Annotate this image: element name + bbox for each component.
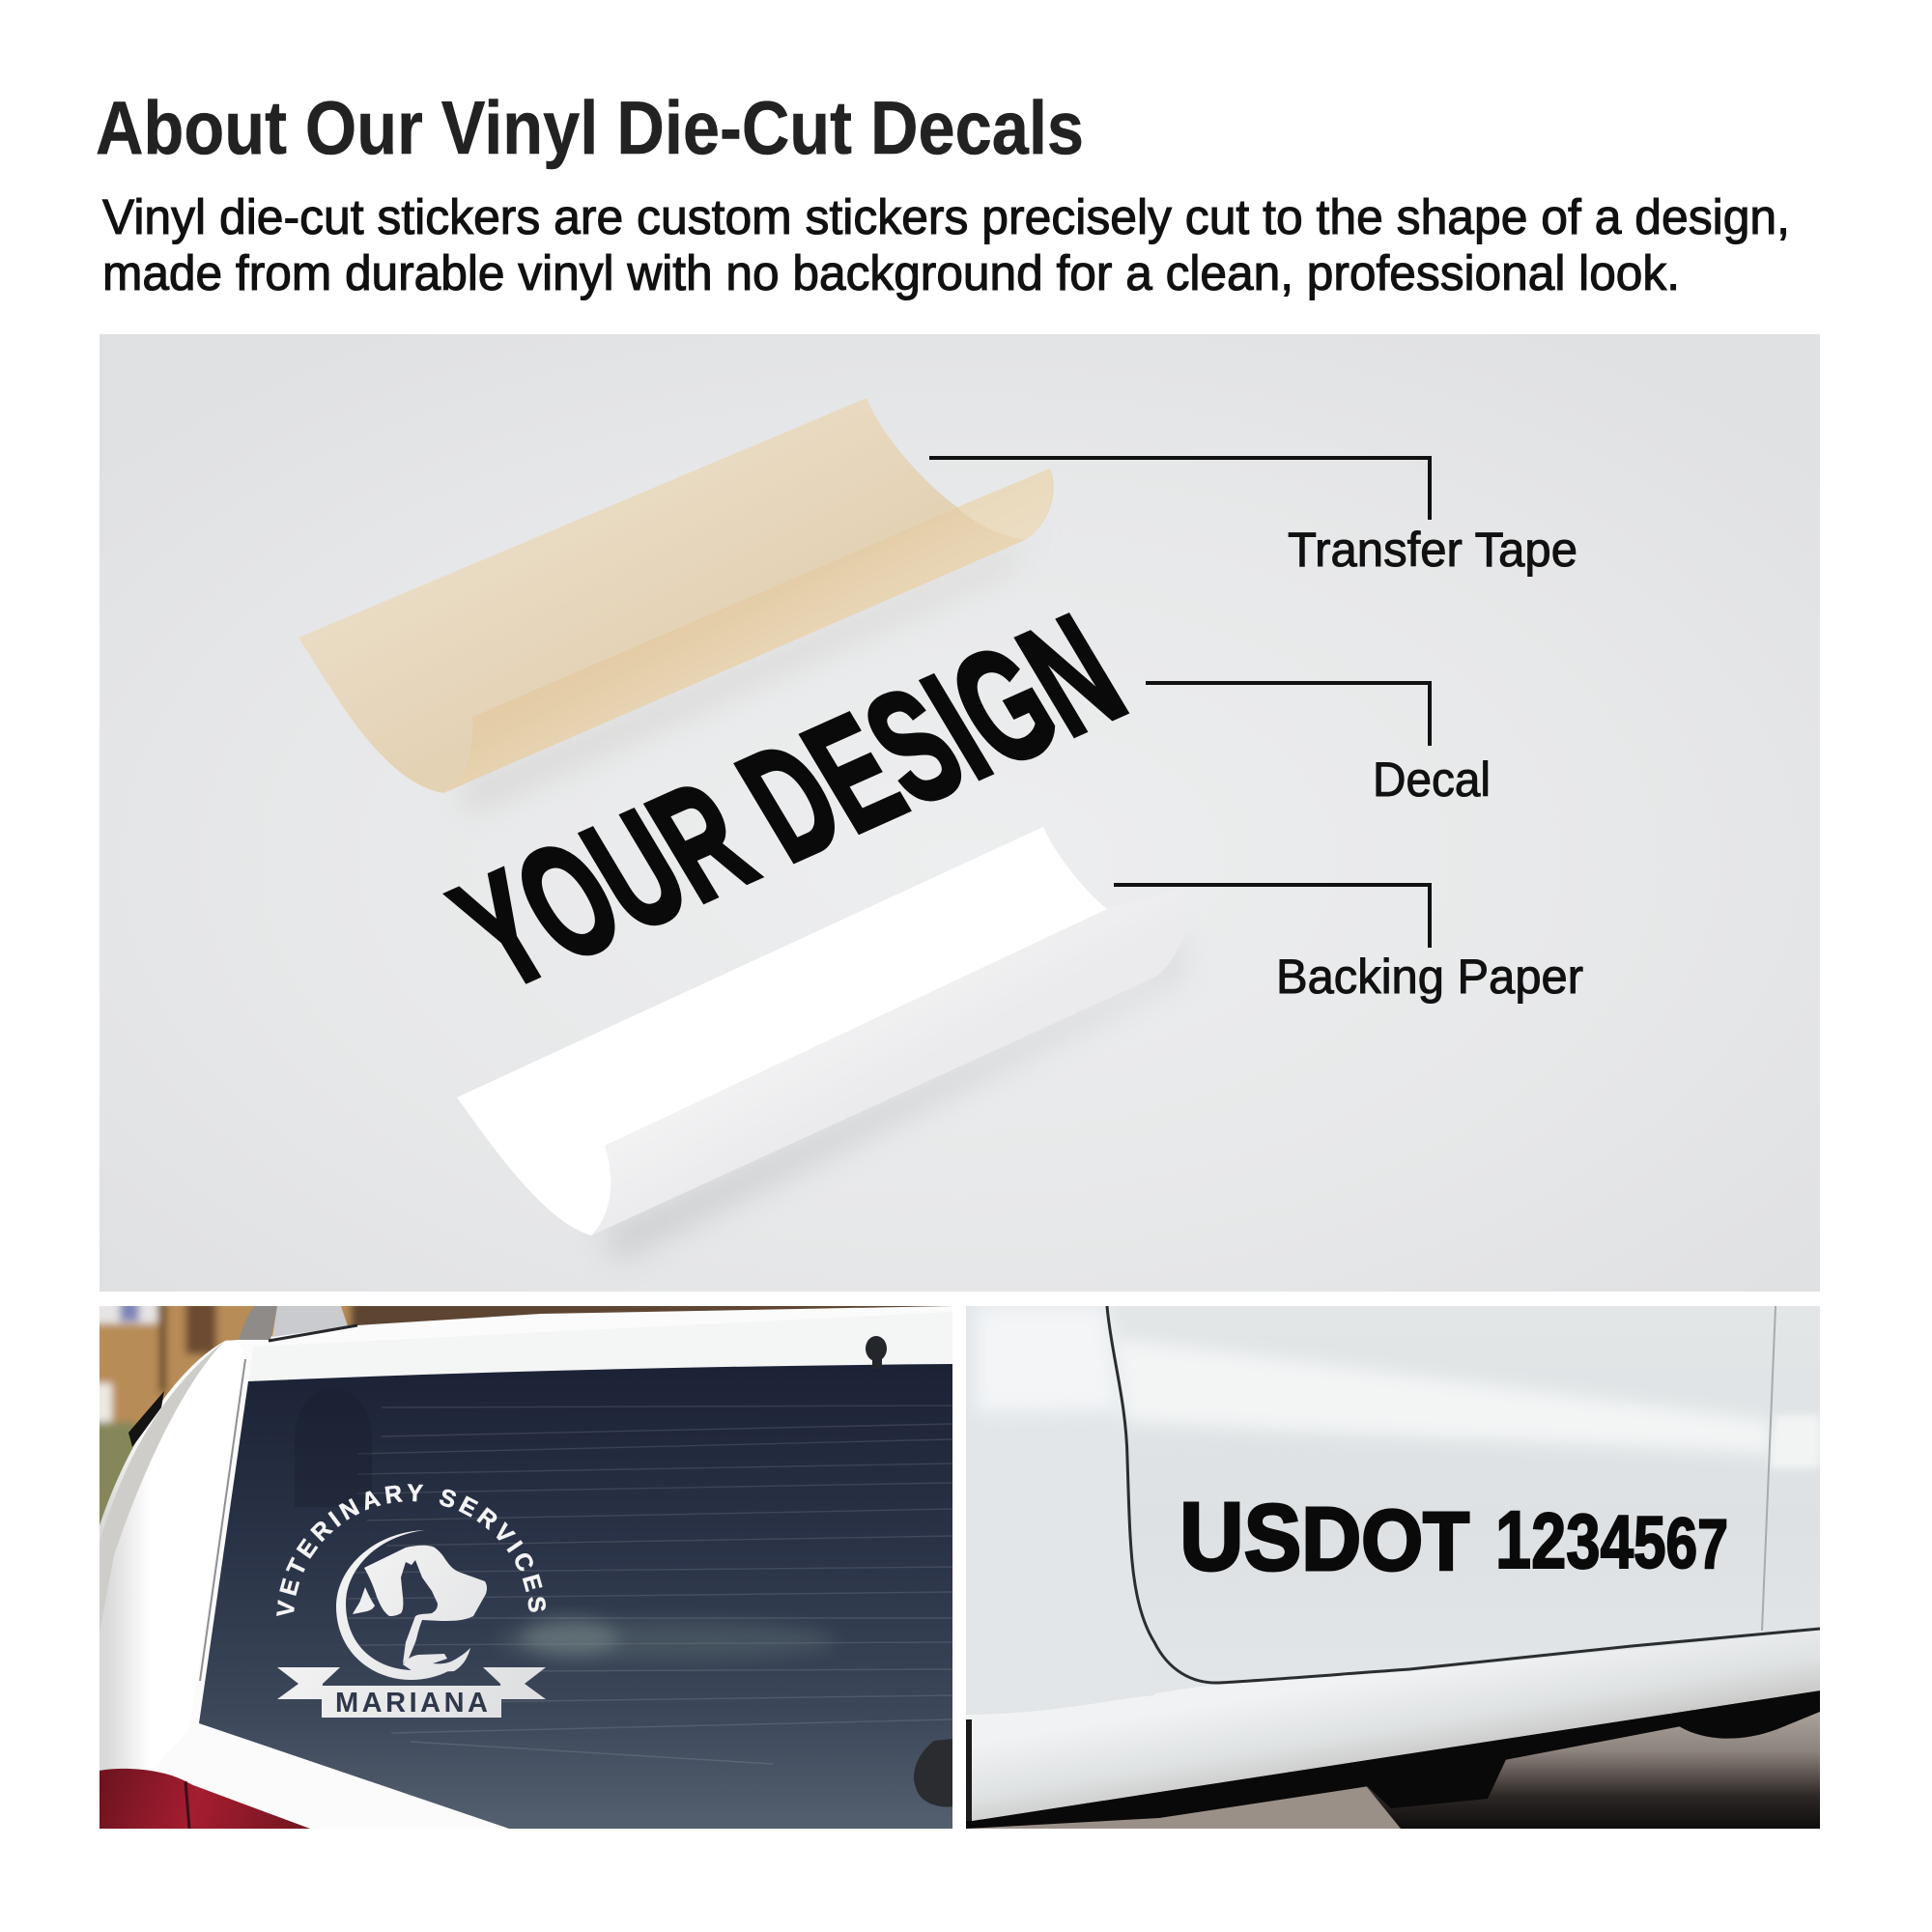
arc text: VETERINARY SERVICES <box>276 1484 546 1616</box>
transfer tape sheet <box>298 398 1058 811</box>
tail lamp <box>99 1769 310 1829</box>
antenna <box>239 1306 357 1341</box>
van body <box>966 1306 1820 1821</box>
arch reflection <box>295 1453 372 1507</box>
roof band shading <box>249 1312 952 1381</box>
leader: transfer tape <box>929 458 1430 520</box>
label: decal: Decal <box>1373 753 1491 807</box>
background building <box>99 1306 952 1526</box>
side mirror shadow <box>128 1391 164 1447</box>
door cut line <box>1107 1306 1820 1683</box>
label: transfer tape: Transfer Tape <box>1288 523 1577 577</box>
rear panel highlight <box>1770 1415 1820 1468</box>
rocker panel <box>966 1631 1820 1821</box>
rear bumper stub <box>966 1719 972 1821</box>
c-pillar <box>99 1341 232 1771</box>
rear washer nozzle <box>866 1336 887 1369</box>
ribbon band <box>322 1686 501 1718</box>
door highlight band <box>1113 1338 1776 1454</box>
rear seam <box>1762 1306 1776 1631</box>
decal: veterinary services logo <box>276 1484 546 1718</box>
wiper motor <box>914 1739 952 1806</box>
crescent <box>336 1530 470 1680</box>
YOUR DESIGN decal: YOUR DESIGN <box>426 582 1151 1022</box>
underbody and tyres <box>966 1676 1820 1829</box>
window reflections <box>348 1406 952 1764</box>
intro text: Vinyl die-cut stickers are custom stickers precisely cut to the shape of a design, <box>102 189 1790 244</box>
dog and cat silhouette <box>364 1546 487 1663</box>
light ground at left <box>966 1782 1401 1829</box>
left body highlight <box>966 1306 1154 1715</box>
glass seam <box>200 1359 245 1681</box>
hand <box>403 1648 470 1673</box>
photo: rear window decal on car <box>99 1306 952 1829</box>
number text: 1234567 <box>1495 1494 1728 1585</box>
ribbon name: MARIANA <box>335 1688 488 1719</box>
intro text: made from durable vinyl with no background for a clean, professional look. <box>102 245 1680 300</box>
USDOT text: USDOT <box>1179 1483 1469 1591</box>
photo: USDOT lettering on van <box>966 1306 1820 1829</box>
intro text <box>102 189 1790 300</box>
leader: backing paper <box>1114 885 1430 948</box>
leader: decal <box>1146 683 1430 746</box>
rear glass <box>199 1364 952 1829</box>
panel: decal layers diagram <box>99 334 1820 1292</box>
small ear <box>353 1587 375 1614</box>
car body <box>99 1306 952 1553</box>
title: About Our Vinyl Die-Cut Decals <box>96 85 1084 170</box>
ribbon tails <box>277 1667 546 1699</box>
label: backing paper: Backing Paper <box>1276 950 1583 1004</box>
dash reflection <box>497 1618 836 1660</box>
ground <box>1366 1712 1820 1829</box>
backing paper sheet <box>457 827 1188 1261</box>
